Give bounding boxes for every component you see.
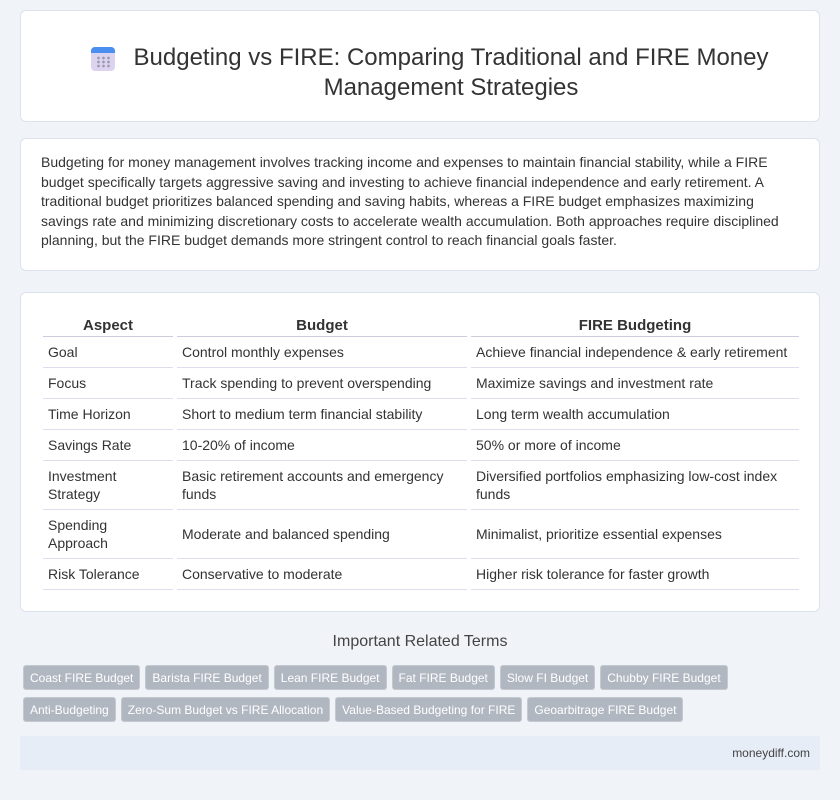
comparison table: Risk Tolerance xyxy=(48,566,140,582)
intro text: Budgeting for money management involves tracking income and expenses to maintain financial stability, while a FIRE budget specifically targets aggressive saving and investing to achieve financial independence and early retirement. A traditional budget prioritizes balanced spending and saving habits, whereas a FIRE budget emphasizes maximizing savings rate and minimizing discretionary costs to accelerate wealth accumulation. Both approaches require disciplined planning, but the FIRE budget demands more stringent control to reach financial goals faster. xyxy=(41,154,779,248)
comparison table: Focus xyxy=(48,375,86,391)
tags: Anti-Budgeting xyxy=(30,703,109,717)
tags: Slow FI Budget xyxy=(507,671,588,685)
comparison table: FIRE Budgeting xyxy=(579,317,691,334)
comparison table: Achieve financial independence & early retirement xyxy=(476,344,787,360)
tags: Zero-Sum Budget vs FIRE Allocation xyxy=(128,703,323,717)
comparison table: 50% or more of income xyxy=(476,437,621,453)
comparison table: Conservative to moderate xyxy=(182,566,342,582)
tags: Geoarbitrage FIRE Budget xyxy=(534,703,676,717)
comparison table: 10-20% of income xyxy=(182,437,295,453)
related terms heading: Important Related Terms xyxy=(333,633,507,650)
tags: Coast FIRE Budget xyxy=(30,671,133,685)
comparison table xyxy=(20,292,820,612)
comparison table: Track spending to prevent overspending xyxy=(182,375,431,391)
comparison table: Moderate and balanced spending xyxy=(182,526,390,542)
comparison table: Diversified portfolios emphasizing low-cost index funds xyxy=(476,468,777,502)
icon: calendar xyxy=(91,47,115,71)
comparison table: Long term wealth accumulation xyxy=(476,406,670,422)
tags: Barista FIRE Budget xyxy=(152,671,262,685)
comparison table: Maximize savings and investment rate xyxy=(476,375,713,391)
comparison table: Savings Rate xyxy=(48,437,131,453)
footer xyxy=(20,736,820,770)
tags xyxy=(23,665,728,722)
comparison table: Spending Approach xyxy=(48,517,108,551)
tags: Fat FIRE Budget xyxy=(399,671,488,685)
comparison table: Budget xyxy=(296,317,348,334)
intro text xyxy=(20,138,820,271)
tags: Chubby FIRE Budget xyxy=(607,671,721,685)
comparison table: Time Horizon xyxy=(48,406,131,422)
comparison table: Investment Strategy xyxy=(48,468,116,502)
comparison table: Goal xyxy=(48,344,78,360)
footer: moneydiff.com xyxy=(732,746,810,760)
title: Budgeting vs FIRE: Comparing Traditional and FIRE Money Management Strategies xyxy=(134,44,768,101)
comparison table: Aspect xyxy=(83,317,133,334)
comparison table: Basic retirement accounts and emergency funds xyxy=(182,468,443,502)
comparison table: Minimalist, prioritize essential expenses xyxy=(476,526,722,542)
comparison table: Short to medium term financial stability xyxy=(182,406,422,422)
tags: Value-Based Budgeting for FIRE xyxy=(342,703,515,717)
tags: Lean FIRE Budget xyxy=(281,671,380,685)
header card xyxy=(20,10,820,122)
comparison table: Higher risk tolerance for faster growth xyxy=(476,566,709,582)
comparison table: Control monthly expenses xyxy=(182,344,344,360)
